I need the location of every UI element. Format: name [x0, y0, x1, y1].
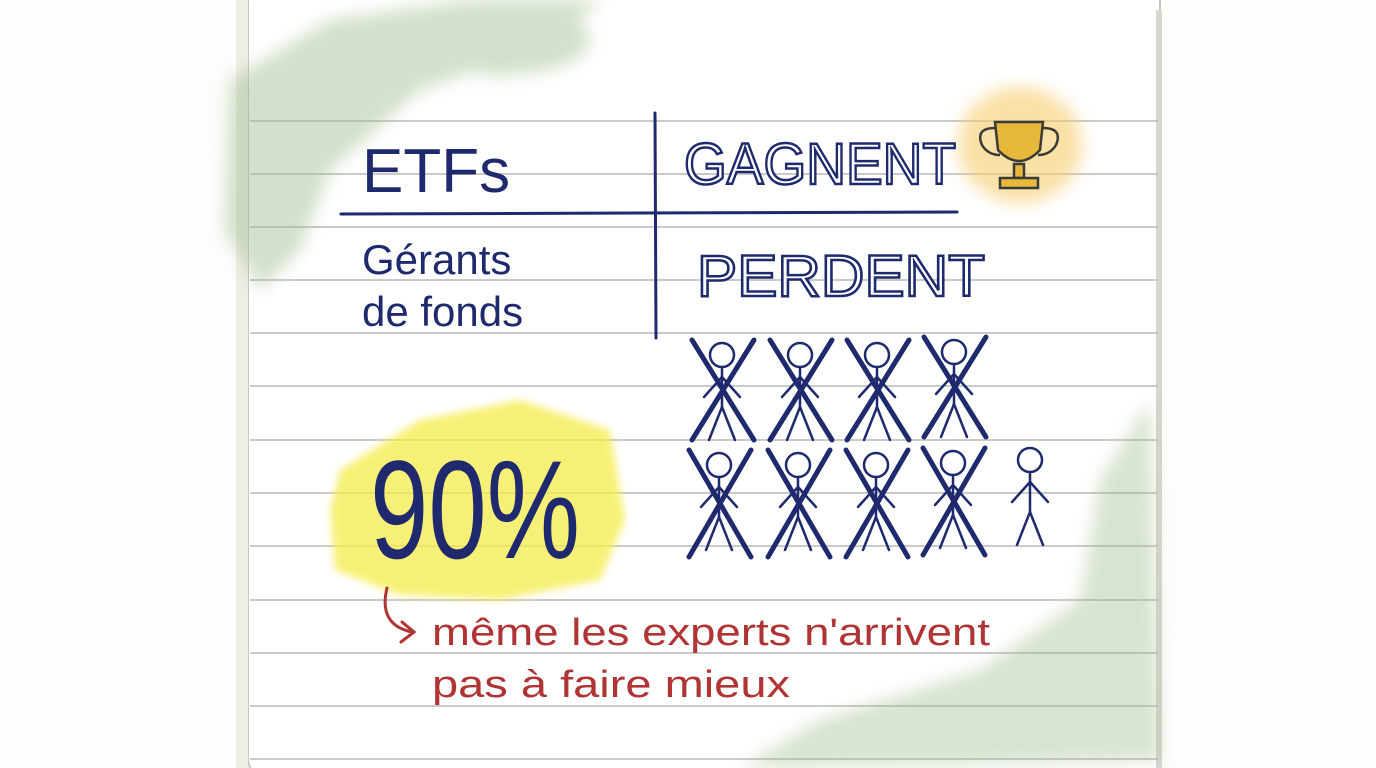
label: Gérants de fonds: Gérants	[362, 236, 511, 283]
callout text: même les experts n'arrivent	[432, 612, 991, 654]
watercolor: yellow behind 90%	[330, 400, 625, 600]
heading: GAGNENT: GAGNENT	[684, 132, 956, 197]
icon: trophy	[980, 122, 1058, 188]
big stat: 90%: 90%	[370, 431, 580, 588]
heading: PERDENT: PERDENT	[697, 244, 985, 309]
label: ETFs: ETFs	[362, 137, 510, 206]
label: Gérants de fonds: de fonds	[362, 288, 523, 335]
table lines	[341, 113, 957, 338]
notebook page	[236, 0, 1162, 768]
label: Gérants de fonds	[362, 236, 523, 335]
watercolor: orange behind trophy	[958, 87, 1082, 203]
watercolor: green top-left	[225, 0, 600, 290]
icon grid: stick figures	[689, 337, 1048, 557]
watercolor: green bottom-right	[740, 400, 1160, 768]
callout text	[432, 612, 991, 706]
arrow	[385, 588, 414, 642]
callout text: pas à faire mieux	[432, 664, 790, 706]
